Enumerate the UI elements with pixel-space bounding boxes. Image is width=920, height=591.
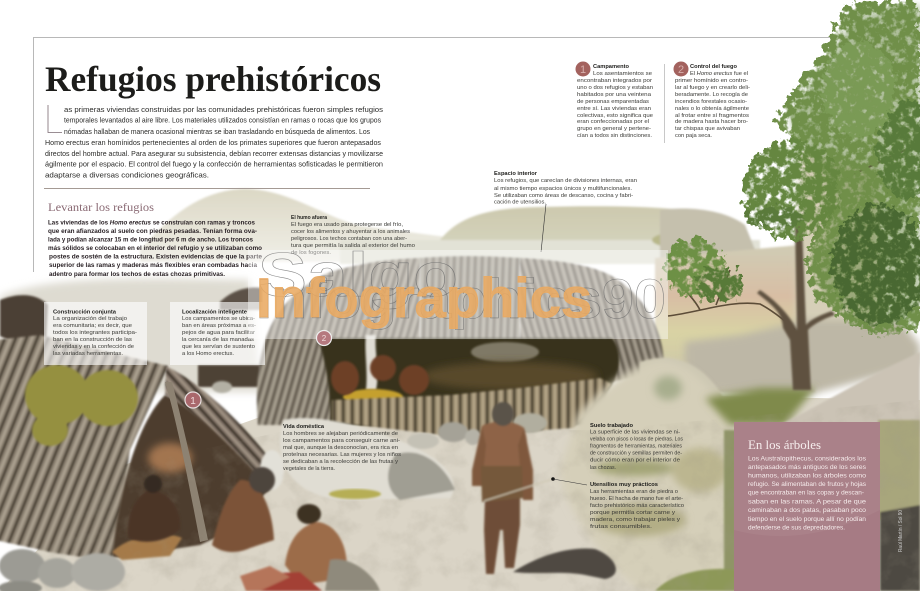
dry grass tufts bbox=[329, 489, 381, 499]
left hut roof right side bbox=[165, 366, 282, 488]
middle foliage mass bbox=[744, 140, 840, 240]
mist above left hut bbox=[0, 279, 262, 392]
panel: en los árboles: saban en las ramas. A pesar de que bbox=[748, 498, 867, 506]
right rock bbox=[780, 352, 920, 470]
marker 1 on hut bbox=[185, 392, 201, 408]
meadow behind huts bbox=[655, 245, 815, 392]
panel heading: En los árboles bbox=[748, 437, 821, 452]
left hut dark entrance bbox=[112, 395, 270, 558]
panel: localización inteligente: pejos de agua para facilitar bbox=[182, 330, 255, 336]
center-front rocks bbox=[212, 381, 547, 500]
trunk bbox=[757, 225, 835, 390]
text: control del fuego: El Homo erectus fue el bbox=[690, 71, 748, 77]
large central hut bbox=[257, 256, 664, 436]
intro paragraph: adaptarse a diversas condiciones geográficas. bbox=[45, 170, 209, 180]
back hut roof left bbox=[220, 288, 262, 310]
text: utensilios muy prácticos: frutas consumibles. bbox=[590, 524, 653, 530]
text: suelo trabajado: ducir cómo eran por el interior de bbox=[590, 458, 680, 464]
intro paragraph: temporales levantados al aire libre. Los materiales utilizados consistían en ramas o rocas que los grupos bbox=[64, 116, 381, 124]
raw hide bbox=[256, 572, 322, 591]
text: vida doméstica: Los hombres se alejaban periódicamente de bbox=[283, 431, 398, 437]
section body: Las viviendas de los Homo erectus se construían con ramas y troncos bbox=[48, 220, 255, 226]
watermark outlined text: Infographics90 bbox=[256, 267, 666, 330]
watermark outlined text: Salgo bbox=[258, 241, 458, 310]
text: suelo trabajado: fragmentos de herramientas, materiales bbox=[590, 444, 682, 450]
text: control del fuego: incendios forestales ocasio- bbox=[675, 99, 747, 105]
text: utensilios muy prácticos: Las herramientas eran de piedra o bbox=[590, 489, 678, 495]
beige rock behind tree bbox=[795, 150, 880, 345]
section body: adentro para formar los techos de estas chozas primitivas. bbox=[49, 271, 225, 278]
arms bbox=[472, 426, 533, 500]
text: campamento: entre sí. Las viviendas eran bbox=[577, 106, 651, 112]
text: espacio interior: Los refugios, que carecían de divisiones internas, eran bbox=[494, 178, 637, 184]
fire bbox=[343, 389, 403, 405]
left foreground rock near meadow bbox=[640, 358, 735, 470]
dark lower foliage bbox=[824, 42, 920, 325]
text: suelo trabajado: velaba con pisos o losas de piedras. Los bbox=[590, 436, 683, 442]
text: campamento: Los asentamientos se bbox=[593, 71, 652, 77]
bottom left stones bbox=[0, 549, 125, 591]
panel: construcción conjunta: La organización del trabajo bbox=[53, 316, 127, 322]
text: el humo afuera: peligrosos. Los techos contaban con una aber- bbox=[291, 236, 407, 242]
marker 2 on hut: 2 bbox=[322, 334, 327, 343]
people around fire bbox=[331, 355, 429, 395]
leader dot bbox=[551, 477, 555, 481]
title: Refugios prehistóricos bbox=[45, 59, 381, 99]
text: vida doméstica: se dedicaban a la recolección de las frutas y bbox=[283, 459, 398, 465]
text: control del fuego: tar chispas que avivaban bbox=[675, 126, 740, 132]
panel: en los árboles: Los Australopithecus, considerados los bbox=[748, 456, 866, 462]
panel: construcción conjunta: ban en la construcción de las bbox=[53, 337, 132, 343]
legs bbox=[484, 498, 520, 574]
icon: number 2: 2 bbox=[678, 64, 684, 76]
moss patch on roof bbox=[25, 365, 138, 446]
text: utensilios muy prácticos: madera, como trabajar pieles y bbox=[590, 517, 680, 523]
illustrator credit: Raúl Martín / Sol 90 bbox=[898, 510, 904, 552]
moss on rock bbox=[594, 376, 728, 536]
grass under tree bbox=[705, 388, 815, 425]
text: campamento: eran confeccionadas por el bbox=[577, 119, 649, 125]
watermark text: Infographics bbox=[256, 266, 592, 329]
back foliage mass bbox=[775, 0, 920, 335]
panel: localización inteligente: ban en áreas próximas a es- bbox=[182, 323, 256, 329]
text: vida doméstica: mal que, aunque la desconocían, era rica en bbox=[283, 445, 398, 451]
text: utensilios muy prácticos: facto prehistórico más característico bbox=[590, 503, 684, 509]
text: control del fuego: de madera hasta hacer bro- bbox=[675, 119, 748, 125]
panel: localización inteligente bbox=[170, 302, 265, 365]
panel: localización inteligente: que les servían de sustento bbox=[182, 344, 255, 350]
text: vida doméstica: los campamentos para conseguir carne ani- bbox=[283, 438, 400, 444]
text: el humo afuera: cocer los alimentos y ahuyentar a los animales bbox=[291, 229, 410, 235]
text: espacio interior: Se utilizaban como áreas de descanso, cocina y fabri- bbox=[494, 193, 633, 199]
section body: que eran afianzados al suelo con piedras pesadas. Tenían forma ova- bbox=[48, 228, 257, 235]
left hut bbox=[0, 335, 282, 562]
text: espacio interior: al mismo tiempo espacios únicos y multifuncionales. bbox=[494, 186, 632, 192]
text: campamento: Campamento bbox=[593, 64, 630, 70]
panel: construcción conjunta: todos los integrantes participa- bbox=[53, 330, 137, 336]
crouching head bbox=[297, 504, 321, 524]
page frame lines bbox=[34, 38, 830, 272]
side branch bbox=[845, 150, 905, 178]
text: campamento: encontraban integrados por bbox=[577, 78, 652, 84]
leader line utensilios bbox=[551, 477, 587, 485]
section body: lada y podían alcanzar 15 m de longitud por 6 m de ancho. Los troncos bbox=[48, 236, 253, 244]
panel: en los árboles: defenderse de sus depredadores. bbox=[748, 524, 845, 532]
text: suelo trabajado: Suelo trabajado bbox=[590, 423, 634, 429]
section heading: Levantar los refugios bbox=[48, 200, 154, 214]
marker 1 on hut: 1 bbox=[190, 396, 196, 407]
interior floor bbox=[422, 362, 598, 390]
crouching figure bbox=[285, 522, 347, 585]
text: campamento bbox=[576, 62, 653, 139]
text: control del fuego: Control del fuego bbox=[690, 64, 738, 70]
section body bbox=[48, 220, 262, 278]
panel: en los árboles: antepasados más antiguos de los seres bbox=[748, 464, 866, 471]
text: campamento: grupo en general y pertene- bbox=[577, 126, 651, 132]
hut interior shadow bbox=[318, 338, 619, 425]
seated head bbox=[144, 475, 162, 493]
leaves bbox=[665, 238, 744, 302]
text: campamento: uno o dos refugios y estaban bbox=[577, 85, 653, 91]
foreground ground bbox=[0, 395, 920, 591]
torso bbox=[479, 422, 527, 470]
text: campamento: cían a todos sin distinciones. bbox=[577, 133, 652, 139]
standing hominid bbox=[472, 402, 616, 579]
text: espacio interior bbox=[494, 171, 637, 206]
text: vida doméstica bbox=[283, 424, 401, 472]
text: campamento: colectivas, esto significa que bbox=[577, 113, 653, 119]
hut dome middle bbox=[420, 256, 520, 345]
panel: construcción conjunta bbox=[44, 302, 147, 365]
text: vida doméstica: Vida doméstica bbox=[283, 424, 325, 430]
dark rough rock upper left bbox=[0, 295, 48, 345]
panel: en los árboles: tiempo en el suelo porque allí no podían bbox=[748, 516, 866, 523]
watermark band bbox=[248, 250, 668, 339]
body shadow bbox=[325, 559, 380, 591]
hut dome right bbox=[520, 258, 664, 382]
support pole bbox=[165, 382, 208, 542]
hut interior warm light bbox=[148, 443, 192, 473]
intro paragraph: as primeras viviendas construidas por las comunidades prehistóricas fueron simples refugios bbox=[64, 105, 383, 114]
text: el humo afuera bbox=[291, 215, 415, 256]
hair bbox=[492, 402, 514, 426]
panel tone bbox=[734, 510, 880, 591]
rock and ground grain bbox=[52, 402, 919, 591]
text: el humo afuera: El humo afuera bbox=[291, 215, 328, 221]
small acacia tree bbox=[665, 238, 795, 330]
text: control del fuego: lar al fuego y en crearlo deli- bbox=[675, 85, 750, 91]
hut dome left bbox=[257, 258, 420, 425]
text: control del fuego: con paja seca. bbox=[675, 133, 712, 139]
text: suelo trabajado bbox=[590, 423, 683, 471]
intro paragraph: Homo erectus eran homínidos pertenecientes al orden de los primates superiores que fueron antepasados bbox=[45, 138, 381, 147]
text: el humo afuera: de los fogones. bbox=[291, 250, 331, 256]
drop cap L bbox=[48, 105, 62, 132]
panel: localización inteligente: Los campamentos se ubica- bbox=[182, 316, 255, 322]
stone tool stick bbox=[484, 479, 553, 501]
hide near kneeling figure bbox=[240, 566, 290, 591]
intro paragraph: ágilmente por el espacio. El control del fuego y la confección de herramientas sofisticadas le permitieron bbox=[45, 160, 383, 168]
text: campamento: habitados por una veintena bbox=[577, 92, 652, 98]
intro paragraph: nómadas hallaban de manera ocasional mientras se iban trasladando en búsqueda de alimentos. Los bbox=[64, 127, 370, 136]
section body: postes de sostén de la estructura. Existen evidencias de que la parte bbox=[49, 254, 262, 260]
leader stroke bbox=[553, 479, 587, 485]
panel: en los árboles bbox=[734, 422, 880, 591]
intro paragraph bbox=[45, 105, 383, 180]
panel: localización inteligente: la cercanía de las manadas bbox=[182, 337, 254, 343]
text: espacio interior: Espacio interior bbox=[494, 171, 538, 177]
panel: en los árboles: humanos, utilizaban los árboles como bbox=[748, 472, 866, 480]
text: vida doméstica: vegetales de la tierra. bbox=[283, 466, 335, 472]
front wall stakes bbox=[332, 378, 612, 436]
panel: localización inteligente: Localización inteligente bbox=[182, 310, 247, 316]
panel: en los árboles: que encontraban en las copas y descan- bbox=[748, 490, 864, 496]
panel: en los árboles: caminaban a dos patas, pasaban poco bbox=[748, 507, 866, 514]
text: suelo trabajado: las chozas. bbox=[590, 465, 616, 471]
watermark outlined text bbox=[256, 241, 666, 330]
left hut roof left side bbox=[0, 335, 168, 562]
marker 2 on hut bbox=[316, 330, 332, 346]
text: el humo afuera: El fuego era usado para protegerse del frío, bbox=[291, 222, 403, 228]
text: utensilios muy prácticos: Utensilios muy prácticos bbox=[590, 482, 658, 488]
distant hills bbox=[140, 189, 760, 264]
fire smoke bbox=[365, 335, 377, 390]
kneeling figure bbox=[212, 480, 274, 552]
text: utensilios muy prácticos: porque permitía cortar carne y bbox=[590, 510, 675, 516]
interior stones bbox=[471, 342, 539, 362]
section body: más sólidos se colocaban en el interior del refugio y se utilizaban como bbox=[48, 245, 262, 252]
kneeling head bbox=[249, 467, 275, 493]
panel: construcción conjunta: era comunitaria; es decir, que bbox=[53, 323, 132, 329]
branches bbox=[668, 270, 795, 330]
text: control del fuego: beradamente. Lo recogía de bbox=[675, 92, 748, 98]
figure inside left hut bbox=[128, 490, 180, 542]
panel: construcción conjunta: viviendas y en la confección de bbox=[53, 344, 134, 350]
right grass and dark rock bbox=[655, 420, 920, 591]
hut dwellers and workers bbox=[128, 467, 380, 591]
text: vida doméstica: proteínas necesarias. Las mujeres y los niños bbox=[283, 452, 401, 458]
panel: localización inteligente: a los Homo erectus. bbox=[182, 351, 234, 357]
panel: construcción conjunta: Construcción conjunta bbox=[53, 310, 117, 316]
large pine tree bbox=[744, 0, 920, 390]
intro paragraph: directos del hombre actual. Para asegurar su subsistencia, debían recorrer extensas distancias y movilizarse bbox=[45, 149, 383, 158]
leader line espacio interior bbox=[541, 204, 546, 252]
text: espacio interior: cación de utensilios. bbox=[494, 200, 546, 206]
panel: en los árboles: refugio. Se alimentaban de frutos y hojas bbox=[748, 481, 866, 488]
panel: construcción conjunta: las variadas herramientas. bbox=[53, 351, 123, 357]
section body: superior de las ramas y maderas más flexibles eran combadas hacia bbox=[49, 262, 257, 269]
grey rocks behind tree bbox=[685, 320, 920, 400]
text: control del fuego bbox=[674, 62, 750, 139]
text: suelo trabajado: La superficie de las viviendas se ni- bbox=[590, 430, 680, 436]
text: control del fuego: primer homínido en contro- bbox=[675, 78, 748, 84]
back hut stakes bbox=[198, 365, 260, 387]
text: el humo afuera: tura que permitía la salida al exterior del humo bbox=[291, 243, 415, 249]
text: control del fuego: nales o lo obtenía ágilmente bbox=[675, 106, 749, 112]
text: control del fuego: al frotar entre sí fragmentos bbox=[675, 113, 749, 119]
hide skirt bbox=[481, 466, 523, 502]
text: utensilios muy prácticos bbox=[590, 482, 684, 530]
right big rock bbox=[560, 360, 740, 591]
text: suelo trabajado: de construcción y semillas permiten de- bbox=[590, 450, 682, 456]
text: campamento: de personas emparentadas bbox=[577, 99, 649, 105]
icon: number 1: 1 bbox=[580, 64, 586, 76]
text: utensilios muy prácticos: hueso. El hacha de mano fue el arte- bbox=[590, 496, 683, 502]
hut floor bbox=[112, 534, 182, 560]
foliage underpaint bbox=[790, 5, 920, 325]
shadow bbox=[513, 549, 616, 579]
